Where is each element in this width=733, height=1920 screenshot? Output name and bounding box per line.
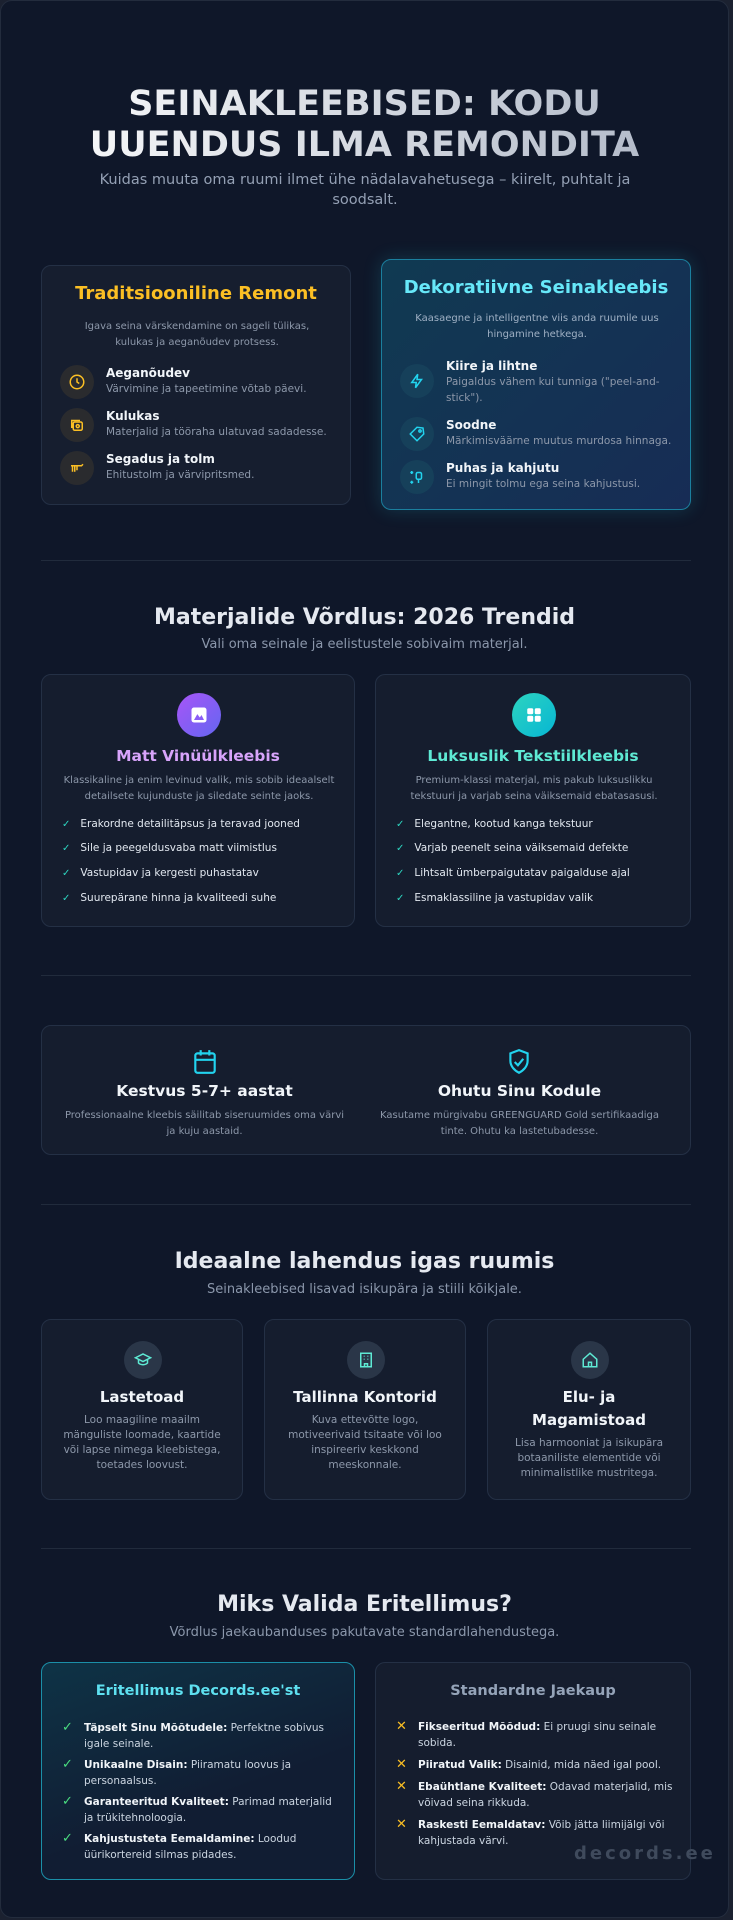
panel: Elu- ja Magamistoad: Magamistoad <box>532 1411 646 1429</box>
item: Kulukas <box>60 408 327 442</box>
list: disadvantages: Raskesti Eemaldatav: Võib jätta liimijälgi või kahjustada värvi. <box>418 1819 664 1847</box>
list: disadvantages: ✕ <box>396 1817 407 1832</box>
feature: durability: Professionaalne kleebis säilitab siseruumides oma värvi ja kuju aastaid. <box>65 1110 344 1137</box>
list: disadvantages <box>396 1719 672 1847</box>
subtitle: Kuidas muuta oma ruumi ilmet ühe nädalavahetusega – kiirelt, puhtalt ja soodsalt. <box>100 172 630 208</box>
icon: grid <box>512 693 556 737</box>
item: Kulukas: Kulukas <box>106 409 160 423</box>
item: Puhas ja kahjutu: Ei mingit tolmu ega seina kahjustusi. <box>446 478 640 490</box>
panel: custom order <box>41 1662 355 1880</box>
subheading: Vali oma seinale ja eelistustele sobivaim materjal. <box>202 637 527 652</box>
icon: shield <box>509 1049 529 1074</box>
item: Kiire ja lihtne: Paigaldus vähem kui tunniga ("peel-and-stick"). <box>446 376 660 404</box>
list: advantages: Täpselt Sinu Mõõtudele: Perfektne sobivus igale seinale. <box>84 1722 324 1750</box>
list: disadvantages: ✕ <box>396 1757 407 1772</box>
list: ✓ Varjab peenelt seina väiksemaid defekte <box>396 842 628 854</box>
list: disadvantages: ✕ <box>396 1719 407 1734</box>
list: ✓ Sile ja peegeldusvaba matt viimistlus <box>62 842 277 854</box>
icon: home <box>571 1341 609 1379</box>
list: advantages: Kahjustusteta Eemaldamine: Loodud üürikortereid silmas pidades. <box>84 1833 296 1861</box>
panel: Tallinna Kontorid <box>264 1319 466 1500</box>
text: intro: Kaasaegne ja intelligentne viis anda ruumile uus hingamine hetkega. <box>415 313 659 340</box>
item: Kulukas: Materjalid ja tööraha ulatuvad sadadesse. <box>106 426 327 438</box>
item: Aeganõudev <box>60 365 307 399</box>
feature: durability <box>65 1050 344 1137</box>
item: Puhas ja kahjutu: Puhas ja kahjutu <box>446 461 559 475</box>
item: Segadus ja tolm: Segadus ja tolm <box>106 452 215 466</box>
list: disadvantages: Fikseeritud Mõõdud: Ei pruugi sinu seinale sobida. <box>418 1721 656 1749</box>
list: advantages: ✓ <box>62 1831 73 1846</box>
text: Klassikaline ja enim levinud valik, mis sobib ideaalselt detailsete kujunduste ja siledate seinte jaoks. <box>64 775 334 802</box>
icon: building <box>347 1341 385 1379</box>
panel: decorative sticker <box>381 259 691 510</box>
feature: safety <box>380 1049 659 1137</box>
watermark: decords.ee <box>574 1843 716 1864</box>
item: Soodne <box>400 417 671 451</box>
heading: Materjalide Võrdlus: Materjalide Võrdlus: 2026 Trendid <box>154 605 575 630</box>
feature: safety: Ohutu Sinu Kodule <box>438 1082 601 1100</box>
item: Soodne: Märkimisväärne muutus murdosa hinnaga. <box>446 435 671 447</box>
item: Segadus ja tolm <box>60 451 254 485</box>
icon: image <box>177 693 221 737</box>
feature: durability: Kestvus 5-7+ aastat <box>116 1082 293 1100</box>
panel: traditional renovation <box>41 265 351 505</box>
heading: why custom: Miks Valida Eritellimus? <box>217 1592 512 1617</box>
subheading: Seinakleebised lisavad isikupära ja stiili kõikjale. <box>207 1282 522 1297</box>
list: ✓ Erakordne detailitäpsus ja teravad jooned <box>62 818 300 830</box>
heading: Dekoratiivne Seinakleebis: Dekoratiivne Seinakleebis <box>404 277 668 298</box>
panel: Elu- ja Magamistoad: Elu- ja <box>563 1388 615 1406</box>
heading: Standardne Jaekaup <box>450 1683 616 1699</box>
item: Kiire ja lihtne: Kiire ja lihtne <box>446 359 537 373</box>
icon: graduation <box>124 1341 162 1379</box>
panel: Lastetoad <box>41 1319 243 1500</box>
title: SEINAKLEEBISED: KODU <box>128 84 601 124</box>
list: advantages <box>62 1720 332 1861</box>
item: Aeganõudev: Aeganõudev <box>106 366 190 380</box>
subheading: Võrdlus jaekaubanduses pakutavate standardlahendustega. <box>170 1625 559 1640</box>
list: advantages: Unikaalne Disain: Piiramatu loovus ja personaalsus. <box>84 1759 291 1787</box>
panel: standard retail <box>375 1662 691 1880</box>
list <box>396 818 630 904</box>
panel: Luksuslik Tekstiilkleebis <box>375 674 691 927</box>
list: ✓ Suurepärane hinna ja kvaliteedi suhe <box>62 892 276 904</box>
heading: Matt Vinüülkleebis <box>116 747 280 765</box>
title: UUENDUS ILMA REMONDITA <box>90 125 639 165</box>
panel: Tallinna Kontorid: Kuva ettevõtte logo, motiveerivaid tsitaate või loo inspireeriv keskkond meeskonnale. <box>288 1414 442 1471</box>
heading: Luksuslik Tekstiilkleebis <box>427 747 639 765</box>
item: Soodne: Soodne <box>446 418 496 432</box>
icon: calendar <box>194 1050 216 1074</box>
list: advantages: ✓ <box>62 1757 73 1772</box>
list: advantages: ✓ <box>62 1794 73 1809</box>
panel: features <box>41 1025 691 1155</box>
heading: rooms: Ideaalne lahendus igas ruumis <box>175 1249 554 1274</box>
list: ✓ Elegantne, kootud kanga tekstuur <box>396 818 593 830</box>
list: ✓ Esmaklassiline ja vastupidav valik <box>396 892 593 904</box>
text: intro: Igava seina värskendamine on sageli tülikas, kulukas ja aeganõudev protsess. <box>85 321 309 348</box>
feature: safety: Kasutame mürgivabu GREENGUARD Gold sertifikaadiga tinte. Ohutu ka lastetubadesse. <box>380 1110 659 1137</box>
list: ✓ Lihtsalt ümberpaigutatav paigalduse ajal <box>396 867 630 879</box>
item: Puhas ja kahjutu <box>400 460 640 494</box>
item: Kiire ja lihtne <box>400 359 660 404</box>
list: disadvantages: Piiratud Valik: Disainid, mida näed igal pool. <box>418 1759 661 1771</box>
panel: Lastetoad: Loo maagiline maailm mänguliste loomade, kaartide või lapse nimega kleebistega, toetades loovust. <box>63 1414 221 1471</box>
item: Aeganõudev: Värvimine ja tapeetimine võtab päevi. <box>106 383 307 395</box>
heading: Traditsiooniline Remont: Traditsiooniline Remont <box>75 283 317 304</box>
panel: Elu- ja Magamistoad <box>487 1319 691 1500</box>
title <box>0 84 729 166</box>
text: Premium-klassi materjal, mis pakub luksuslikku tekstuuri ja varjab seina väiksemaid ebatasasusi. <box>410 775 658 802</box>
list: advantages: ✓ <box>62 1720 73 1735</box>
panel: Elu- ja Magamistoad: Lisa harmooniat ja isikupära botaaniliste elementide või minimalistlike mustritega. <box>515 1437 663 1479</box>
list <box>62 818 300 904</box>
list: disadvantages: Ebaühtlane Kvaliteet: Odavad materjalid, mis võivad seina rikkuda. <box>418 1781 672 1809</box>
panel: Tallinna Kontorid: Tallinna Kontorid <box>293 1388 437 1406</box>
list: ✓ Vastupidav ja kergesti puhastatav <box>62 867 259 879</box>
item: Segadus ja tolm: Ehitustolm ja värvipritsmed. <box>106 469 254 481</box>
panel: Lastetoad: Lastetoad <box>100 1388 184 1406</box>
heading: Eritellimus Decords.ee'st <box>96 1683 300 1699</box>
list: advantages: Garanteeritud Kvaliteet: Parimad materjalid ja trükitehnoloogia. <box>84 1796 332 1824</box>
panel: Matt Vinüülkleebis <box>41 674 355 927</box>
list: disadvantages: ✕ <box>396 1779 407 1794</box>
